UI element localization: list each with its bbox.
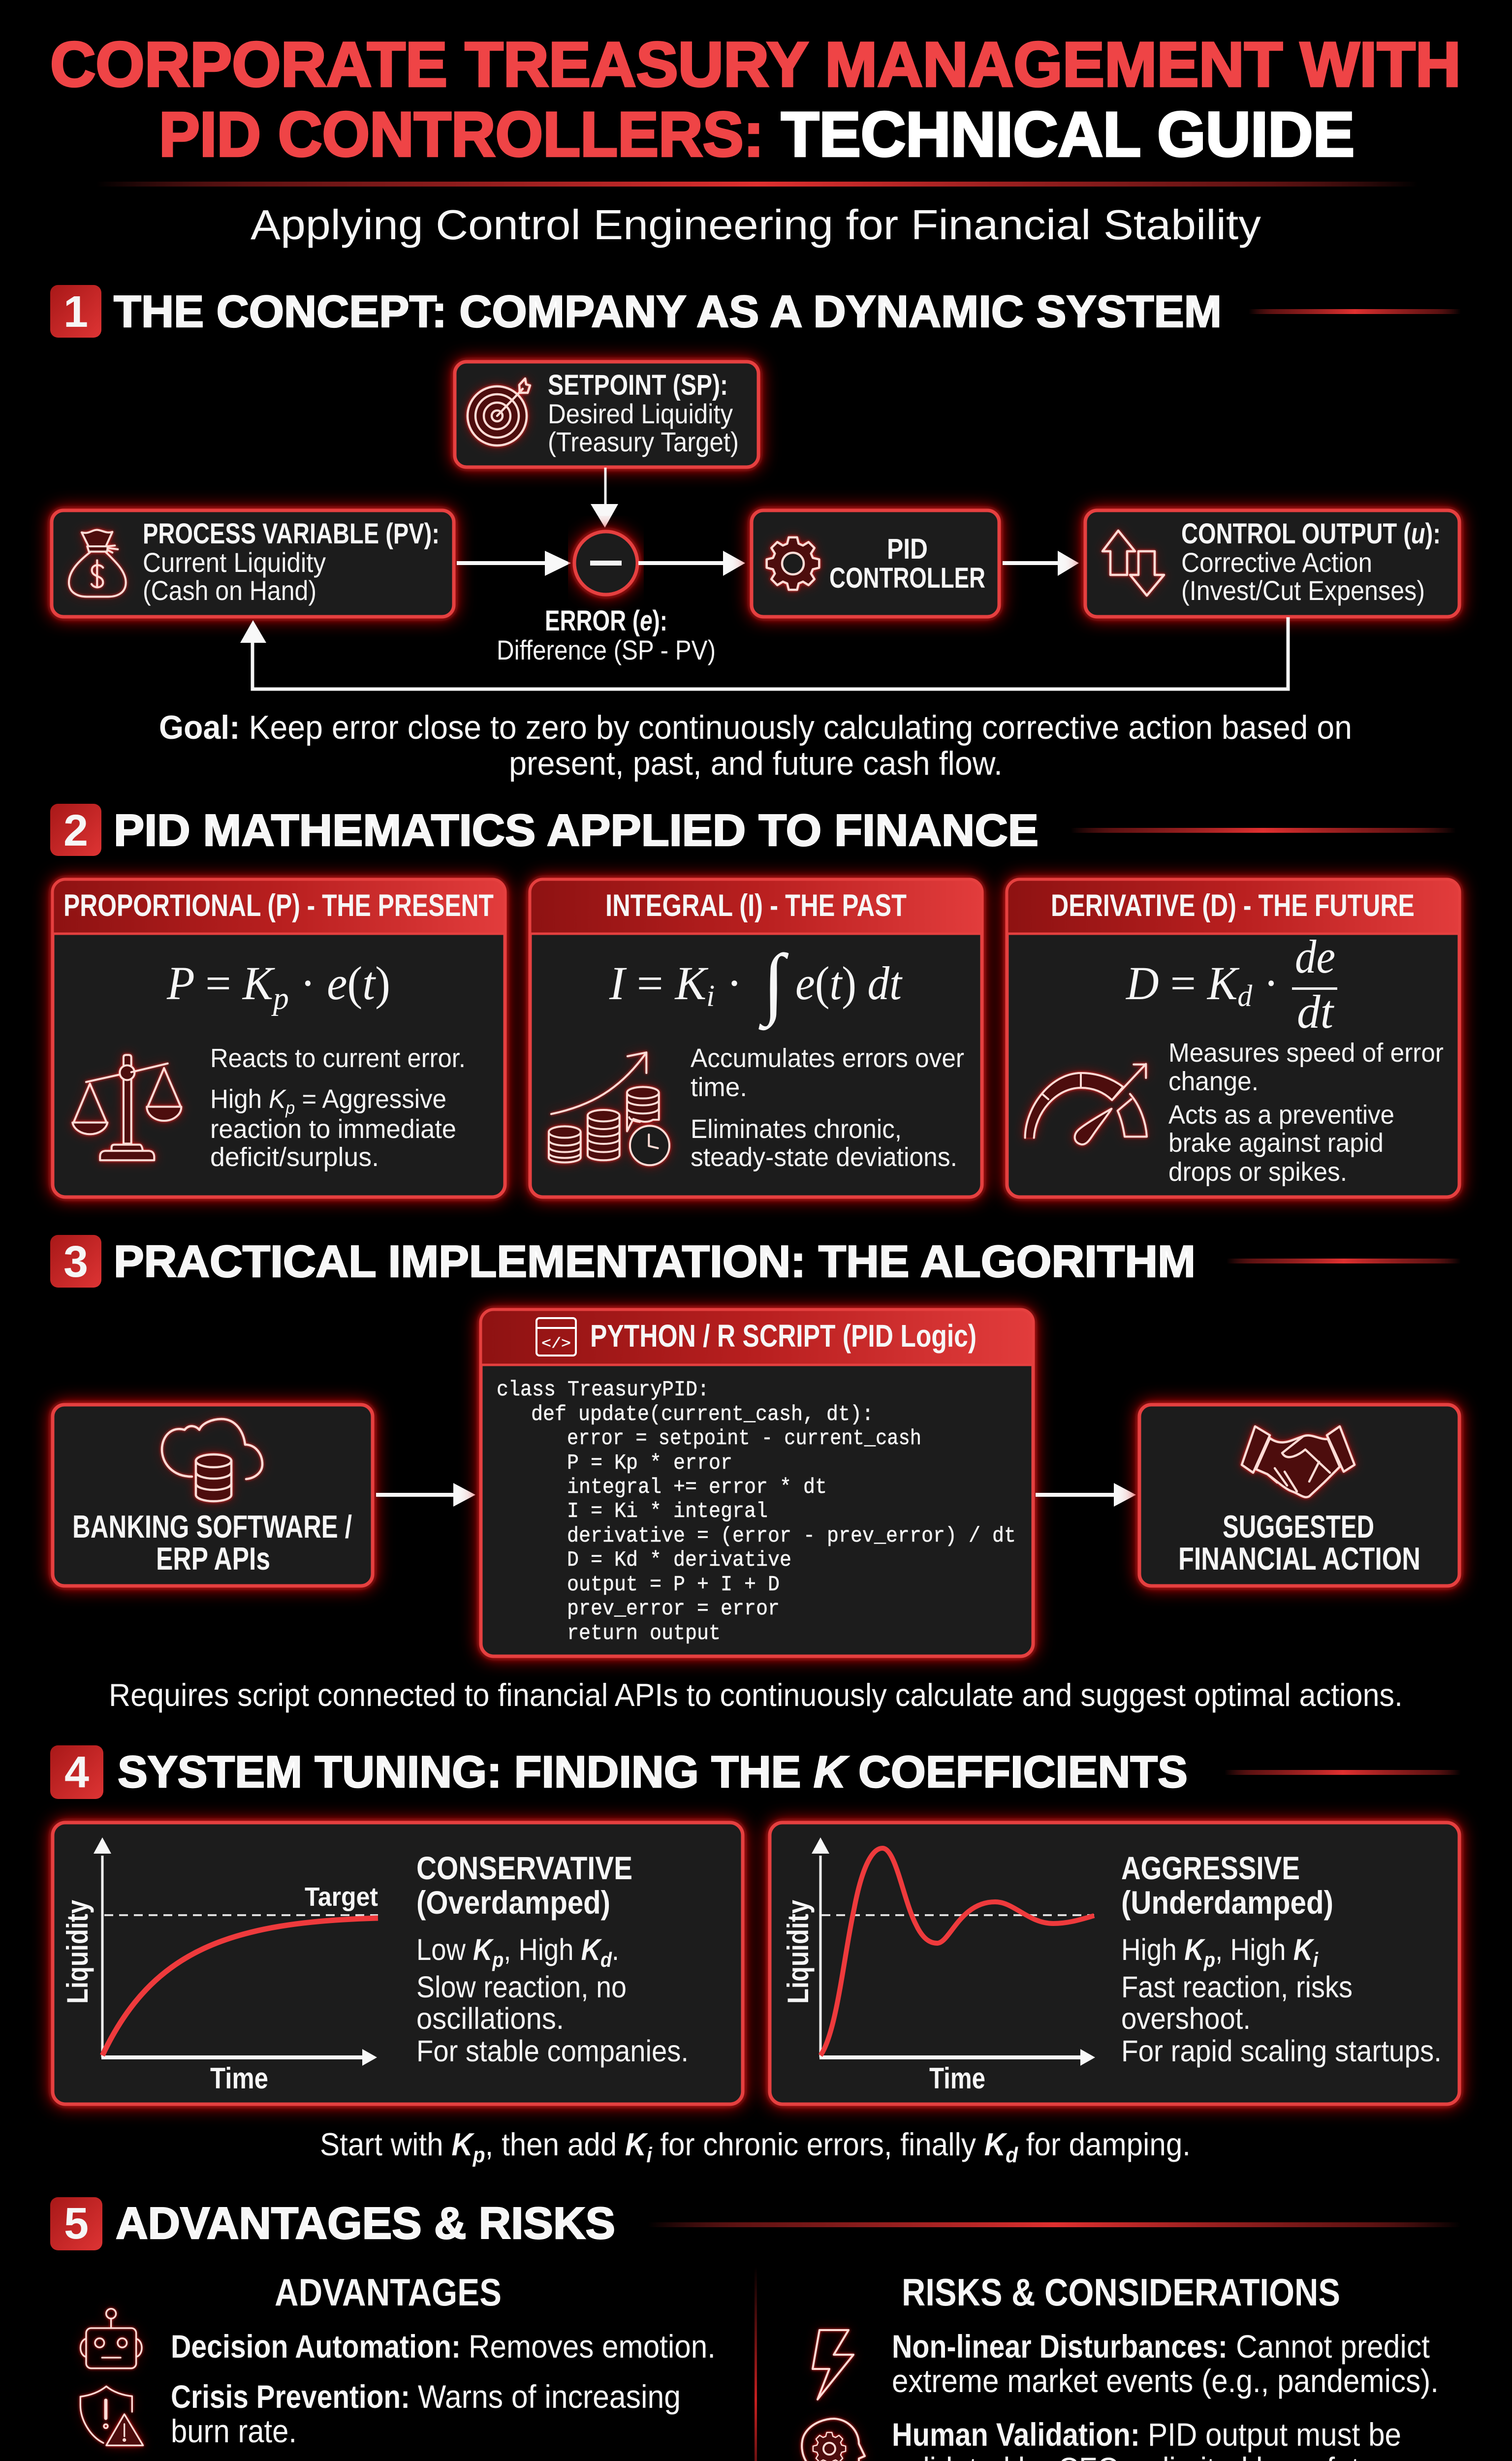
text: aggressive: Fast reaction, risks (1121, 1970, 1353, 2004)
text: conservative: d (600, 1948, 612, 1971)
text: proportional description: Reacts to current error. (210, 1043, 466, 1073)
text: decision automation: Removes emotion. (469, 2328, 716, 2365)
caption: tuning: for damping. (1018, 2126, 1191, 2162)
text: proportional description: = Aggressive (295, 1084, 446, 1114)
formula: I: · (715, 957, 742, 1010)
panel: aggressive (770, 1823, 1459, 2104)
text: derivative description: Measures speed of error (1168, 1038, 1444, 1068)
goal text: Goal: Keep error close to zero by continuously calculating corrective action based on (159, 709, 1352, 746)
text: derivative description: drops or spikes. (1168, 1157, 1347, 1187)
subtitle: Applying Control Engineering for Financial Stability (251, 202, 1261, 249)
chart: overdamped response (61, 1837, 378, 2095)
text: crisis prevention: burn rate. (171, 2413, 297, 2449)
formula: D: D = K (1126, 957, 1239, 1010)
panel: pid controller (752, 510, 999, 617)
text: aggressive (1121, 1850, 1442, 2068)
text: aggressive: i (1313, 1948, 1319, 1971)
goal text: present, past, and future cash flow. (509, 745, 1003, 782)
text: conservative: For stable companies. (416, 2034, 689, 2068)
icon: handshake (1242, 1426, 1354, 1497)
goal text (159, 709, 1352, 782)
text: integral description: Accumulates errors over (691, 1043, 964, 1073)
panel: python script: </> (541, 1336, 571, 1353)
text: aggressive: overshoot. (1121, 2002, 1251, 2035)
caption: tuning: K (984, 2126, 1008, 2162)
icon: human head with gear (802, 2419, 865, 2461)
icon: robot (80, 2309, 142, 2368)
panel: integral: INTEGRAL (I) - THE PAST (605, 888, 907, 923)
text: crisis prevention: Crisis Prevention: (171, 2378, 410, 2415)
icon: target (468, 379, 530, 445)
text: integral description: Eliminates chronic, (691, 1114, 902, 1144)
panel: control output: Corrective Action (1181, 547, 1372, 578)
section 2 heading: PID MATHEMATICS APPLIED TO FINANCE (114, 806, 1039, 855)
text: integral description (691, 1043, 964, 1172)
caption: tuning: i (646, 2143, 652, 2167)
formula: I: ∫ (758, 939, 789, 1031)
text: derivative description: change. (1168, 1067, 1259, 1096)
text: non-linear disturbances: extreme market events (e.g., pandemics). (892, 2363, 1439, 2399)
text: human validation: PID output must be (1148, 2416, 1401, 2453)
panel: setpoint: SETPOINT (SP): (548, 369, 728, 401)
caption: tuning: Start with K (320, 2126, 474, 2162)
icon: gauge (1025, 1064, 1147, 1144)
panel: pid controller: PID (887, 533, 928, 565)
text: aggressive: For rapid scaling startups. (1121, 2034, 1442, 2068)
formula: P: e(t) (327, 957, 391, 1010)
text: conservative: , High (504, 1933, 581, 1966)
caption: tuning: K (625, 2126, 648, 2162)
panel: banking software: BANKING SOFTWARE / (72, 1509, 352, 1545)
formula: I: I = K (609, 957, 707, 1010)
text: crisis prevention (171, 2378, 681, 2449)
arrow: junction to controller (638, 551, 745, 576)
section 4 heading: SYSTEM TUNING: FINDING THE K COEFFICIENTS (118, 1747, 1188, 1797)
text: aggressive: p (1203, 1948, 1215, 1971)
formula: P: · (289, 957, 327, 1010)
section 5 heading (50, 2197, 1461, 2250)
panel: derivative: DERIVATIVE (D) - THE FUTURE (1051, 888, 1415, 923)
text: aggressive: K (1293, 1933, 1315, 1966)
text: aggressive: (Underdamped) (1121, 1884, 1333, 1921)
text: proportional description (210, 1043, 466, 1172)
panel: proportional: PROPORTIONAL (P) - THE PRESENT (63, 888, 494, 923)
code listing: P = Kp * error (567, 1451, 732, 1476)
title: PID CONTROLLERS: (159, 99, 764, 170)
title (50, 30, 1461, 170)
code listing: error = setpoint - current_cash (567, 1426, 921, 1451)
panel: control output (1085, 510, 1459, 617)
formula: D: · (1252, 957, 1279, 1010)
panel: control output: CONTROL OUTPUT (u): (1181, 518, 1441, 550)
panel: derivative (1007, 880, 1459, 1197)
panel: process variable: (Cash on Hand) (143, 575, 316, 606)
section 3 heading: PRACTICAL IMPLEMENTATION: THE ALGORITHM (114, 1237, 1196, 1287)
text: conservative: p (492, 1948, 504, 1971)
code listing: return output (567, 1621, 721, 1646)
error label: Difference (SP - PV) (497, 634, 716, 665)
text: conservative: Low K (416, 1933, 495, 1966)
formula: I: e(t) dt (795, 957, 903, 1010)
panel: python script: PYTHON / R SCRIPT (PID Logic) (590, 1318, 976, 1354)
section 1 heading: THE CONCEPT: COMPANY AS A DYNAMIC SYSTEM (114, 287, 1222, 337)
text: aggressive: AGGRESSIVE (1121, 1850, 1300, 1886)
caption: tuning: for chronic errors, finally (652, 2126, 984, 2162)
chart: underdamped response (782, 1837, 1095, 2095)
text: proportional description: High K (210, 1084, 286, 1114)
panel: control output: (Invest/Cut Expenses) (1181, 575, 1425, 606)
caption: tuning: d (1006, 2143, 1018, 2167)
error label: ERROR (e): (545, 605, 667, 637)
section 1 heading: 1 (63, 287, 88, 337)
text: human validation: Human Validation: (892, 2416, 1140, 2453)
formula: D (1125, 930, 1337, 1038)
icon: up and down arrows (1102, 531, 1164, 596)
code listing: integral += error * dt (567, 1475, 827, 1500)
panel: advantages (80, 2271, 716, 2461)
arrow: setpoint to summing junction (591, 468, 618, 528)
text: decision automation (171, 2328, 716, 2365)
panel: proportional (53, 880, 505, 1197)
panel: suggested financial action (1139, 1405, 1459, 1586)
text: aggressive: High K (1121, 1933, 1206, 1966)
code listing: class TreasuryPID: (497, 1378, 709, 1402)
text: derivative description: brake against rapid (1168, 1128, 1384, 1158)
panel: banking software (53, 1405, 373, 1586)
chart: underdamped response: Liquidity (782, 1899, 815, 2004)
section 5 heading: 5 (64, 2199, 89, 2248)
formula: D: d (1237, 979, 1253, 1013)
panel: python script (481, 1310, 1033, 1656)
chart: overdamped response: Time (210, 2062, 268, 2095)
text: derivative description: Acts as a preventive (1168, 1100, 1394, 1130)
text: proportional description: reaction to immediate (210, 1114, 456, 1144)
panel: setpoint (455, 362, 758, 467)
summing junction (574, 532, 637, 595)
code listing: I = Ki * integral (567, 1499, 768, 1524)
panel: process variable (52, 510, 454, 617)
icon: cloud database (162, 1419, 262, 1501)
panel: pid controller: CONTROLLER (829, 562, 985, 594)
code listing: D = Kd * derivative (567, 1548, 791, 1573)
formula: D: de (1295, 930, 1335, 983)
formula: I: i (706, 979, 715, 1013)
icon: gear (767, 537, 819, 590)
panel: setpoint: Desired Liquidity (548, 398, 733, 429)
text: derivative description (1168, 1038, 1444, 1187)
section 5 heading: ADVANTAGES & RISKS (116, 2199, 615, 2248)
icon: warning shield (80, 2386, 143, 2445)
code listing: def update(current_cash, dt): (531, 1402, 874, 1427)
caption: algorithm: Requires script connected to financial APIs to continuously calculate and suggest optimal actions. (109, 1677, 1403, 1713)
caption: tuning: p (472, 2143, 485, 2167)
arrow: process variable to junction (457, 551, 571, 576)
title: CORPORATE TREASURY MANAGEMENT WITH (50, 30, 1461, 100)
section 2 heading: 2 (63, 806, 88, 855)
text: non-linear disturbances: Non-linear Disturbances: (892, 2328, 1228, 2365)
text: conservative: Slow reaction, no (416, 1970, 627, 2004)
panel: risks (802, 2271, 1439, 2461)
text: decision automation: Decision Automation: (171, 2328, 461, 2365)
formula: I (609, 939, 903, 1031)
text: conservative: . (612, 1933, 619, 1966)
section 2 heading (50, 804, 1456, 856)
text: conservative: oscillations. (416, 2002, 564, 2035)
chart: overdamped response: Liquidity (61, 1899, 94, 2004)
arrow: banking to script (376, 1483, 475, 1507)
error label (497, 605, 716, 665)
chart: overdamped response: Target (305, 1882, 378, 1912)
section 4 heading: 4 (64, 1748, 89, 1797)
panel: advantages: ADVANTAGES (275, 2271, 502, 2314)
panel: setpoint: (Treasury Target) (548, 426, 739, 457)
arrow: script to action (1036, 1483, 1136, 1507)
panel: suggested financial action: FINANCIAL ACTION (1178, 1541, 1420, 1577)
text: aggressive: , High (1215, 1933, 1293, 1966)
caption: tuning: , then add (485, 2126, 625, 2162)
icon: code window (536, 1318, 576, 1356)
panel: process variable: Current Liquidity (143, 547, 326, 578)
icon: lightning (813, 2330, 853, 2399)
text: conservative: CONSERVATIVE (416, 1850, 632, 1886)
text: non-linear disturbances: Cannot predict (1236, 2328, 1430, 2365)
code listing: prev_error = error (567, 1597, 780, 1621)
text: human validation (892, 2416, 1401, 2461)
panel: process variable: PROCESS VARIABLE (PV): (143, 518, 440, 550)
panel: banking software: ERP APIs (156, 1541, 270, 1577)
text: integral description: time. (691, 1073, 747, 1102)
text: conservative: (Overdamped) (416, 1884, 610, 1921)
text: conservative: K (581, 1933, 602, 1966)
text: integral description: steady-state deviations. (691, 1142, 957, 1172)
code listing (497, 1378, 1016, 1646)
text: proportional description: deficit/surplus. (210, 1142, 379, 1172)
title: TECHNICAL GUIDE (781, 99, 1354, 170)
arrow: feedback loop (240, 617, 1288, 689)
code listing: output = P + I + D (567, 1573, 780, 1597)
panel: conservative (53, 1823, 743, 2104)
code listing: derivative = (error - prev_error) / dt (567, 1524, 1016, 1548)
formula: P: P = K (167, 957, 275, 1010)
section 3 heading: 3 (63, 1237, 88, 1287)
text: proportional description: p (285, 1098, 295, 1118)
panel: suggested financial action: SUGGESTED (1223, 1509, 1374, 1545)
icon: money bag (69, 530, 126, 597)
panel: integral (530, 880, 982, 1197)
panel: risks: RISKS & CONSIDERATIONS (902, 2271, 1340, 2314)
arrow: controller to output (1003, 551, 1079, 576)
text: conservative (416, 1850, 689, 2068)
icon: coins and clock (549, 1052, 669, 1165)
text: crisis prevention: Warns of increasing (418, 2378, 681, 2415)
formula: D: dt (1297, 985, 1334, 1038)
formula: P: p (271, 980, 289, 1016)
text: non-linear disturbances (892, 2328, 1439, 2399)
icon: scales (72, 1055, 181, 1160)
chart: underdamped response: Time (929, 2062, 985, 2095)
